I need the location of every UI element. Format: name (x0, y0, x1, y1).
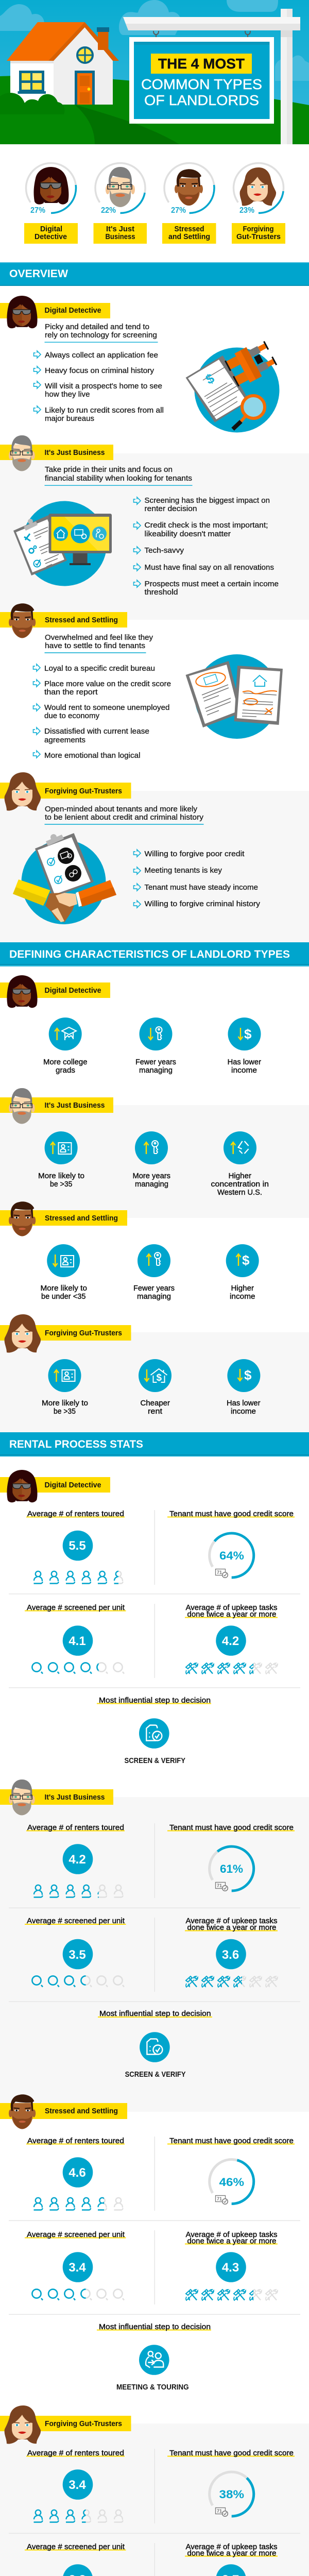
stat: upkeep tasks 4.3: Average # of upkeep tasks (185, 2231, 277, 2239)
name bar (0, 2094, 127, 2129)
stat: good credit score 38%: Tenant must have good credit score (169, 2449, 294, 2458)
bullet list: threshold (144, 588, 178, 597)
stat: renters toured 5.5: 5.5 (68, 1539, 86, 1553)
trait: more college grads: grads (56, 1066, 75, 1075)
sign post (123, 9, 300, 144)
stat: renters toured 5.5 (26, 1510, 125, 1584)
label: Digital Detective (24, 223, 78, 244)
description: rely on technology for screening (45, 331, 157, 340)
stat: most influential step, meeting and touring (97, 2323, 211, 2392)
label: Forgiving Gut-Trusters (232, 223, 285, 244)
panel: overview Forgiving Gut-Trusters (0, 772, 309, 942)
name bar: Stressed and Settling (45, 2107, 118, 2115)
stat: upkeep tasks 3.7: done twice a year or more (187, 2549, 276, 2557)
panel: overview It's Just Business (0, 435, 309, 620)
section band: defining characteristics: DEFINING CHARACTERISTICS OF LANDLORD TYPES (9, 948, 290, 960)
sign board (129, 37, 274, 124)
stat: most influential step, screen and verify: Most influential step to decision (99, 2010, 211, 2018)
trait: higher income: Higher (231, 1284, 254, 1293)
panel: stats Forgiving Gut-Trusters (0, 2405, 309, 2576)
trait: higher concentration in Western U.S.: Western U.S. (217, 1189, 262, 1197)
name bar (0, 772, 131, 811)
panel: stats Stressed and Settling (0, 2094, 300, 2389)
name bar (0, 435, 113, 471)
trait: fewer years managing: managing (137, 1293, 171, 1301)
stat: screened per unit 3.4 (25, 2231, 126, 2300)
trait: has lower income: Has lower (227, 1399, 261, 1408)
gauge: It's Just Business 22% (85, 153, 155, 223)
bullet list: Meeting tenants is key (144, 867, 222, 875)
bullet list: agreements (44, 736, 85, 744)
stat: renters toured 4.2 (26, 1824, 125, 1897)
panel: characteristics Forgiving Gut-Trusters (0, 1314, 309, 1432)
stat: good credit score 61%: 61% (220, 1862, 243, 1875)
stat: good credit score 46% (167, 2137, 295, 2212)
illustration: report, binoculars, magnifier: $ (203, 370, 217, 387)
trait: more likely to be over 35: be >35 (50, 1180, 72, 1189)
bullet list: Screening has the biggest impact on (144, 497, 270, 505)
trait: more likely to be over 35 (42, 1359, 88, 1416)
name bar: Digital Detective (44, 987, 101, 995)
stat: renters toured 3.4: 3.4 (68, 2478, 86, 2492)
description (44, 805, 204, 825)
stat: good credit score 61%: 71 (217, 1883, 222, 1888)
label: It's Just Business: Business (105, 233, 135, 241)
title (141, 56, 262, 108)
stat: screened per unit 4.1: 4.1 (68, 1634, 86, 1648)
stat: most influential step, meeting and touring: MEETING & TOURING (116, 2383, 189, 2392)
name bar: Digital Detective (44, 1481, 101, 1489)
label: It's Just Business (94, 223, 147, 244)
landlord type summary row (0, 144, 309, 262)
name bar: Forgiving Gut-Trusters (45, 2420, 122, 2428)
stat: upkeep tasks 3.7 (185, 2543, 278, 2576)
cloud right (275, 56, 309, 81)
stat: upkeep tasks 3.6: 3.6 (222, 1948, 239, 1962)
trait: has lower income (228, 1018, 261, 1075)
stat: screened per unit 3.4: Average # screened per unit (27, 2231, 125, 2239)
stat: renters toured 4.6: 4.6 (68, 2166, 86, 2180)
trait: more likely to be over 35: More likely to (42, 1399, 88, 1408)
section band: rental process stats (0, 1432, 309, 1456)
trait: fewer years managing: managing (139, 1066, 173, 1075)
bullet list (34, 351, 164, 423)
stat: screened per unit 3.5: Average # screened per unit (27, 1917, 125, 1925)
stat: upkeep tasks 4.2: done twice a year or more (187, 1611, 276, 1619)
bullet list: Credit check is the most important; (144, 521, 268, 530)
title: COMMON TYPES (141, 76, 262, 92)
title: OF LANDLORDS (144, 92, 259, 108)
stat: upkeep tasks 4.2: Average # of upkeep tasks (185, 1604, 277, 1612)
label: It's Just Business: It's Just (106, 225, 134, 233)
trait: has lower income: income (231, 1408, 256, 1416)
bullet list: Willing to forgive criminal history (144, 900, 261, 908)
section band: rental process stats: RENTAL PROCESS STATS (9, 1438, 143, 1450)
bullet list: due to economy (44, 712, 100, 720)
stat: upkeep tasks 3.6: Average # of upkeep tasks (185, 1917, 277, 1925)
panel: characteristics Stressed and Settling (0, 1201, 309, 1332)
stat: good credit score 61%: Tenant must have good credit score (169, 1824, 294, 1832)
illustration: report, binoculars, magnifier (185, 338, 279, 433)
section band: defining characteristics (0, 942, 309, 967)
stat: upkeep tasks 4.3: done twice a year or more (187, 2237, 276, 2245)
illustration: clipboard and handshake (13, 833, 116, 924)
stat: renters toured 4.2: 4.2 (68, 1853, 86, 1867)
bullet list: Will visit a prospect's home to see (45, 382, 162, 391)
description: Open-minded about tenants and more likely (45, 805, 198, 814)
title: THE 4 MOST (158, 56, 245, 72)
stat: good credit score 46%: 71 (217, 2196, 222, 2201)
stat: upkeep tasks 4.3 (185, 2231, 278, 2300)
label: Digital Detective: Digital (40, 225, 62, 233)
cloud left (0, 4, 44, 31)
description (44, 634, 153, 653)
label: Stressed and Settling: Stressed (174, 225, 204, 233)
stat: good credit score 38%: 38% (219, 2488, 244, 2501)
panel: characteristics Digital Detective (0, 967, 309, 1105)
hills (0, 76, 309, 144)
description: financial stability when looking for tenants (45, 474, 192, 483)
stat: good credit score 61% (167, 1824, 295, 1900)
trait: cheaper rent: $ (157, 1372, 162, 1383)
trait: has lower income: $ (244, 1367, 252, 1383)
stat: screened per unit 3.5 (25, 1917, 126, 1987)
bullet list: Likely to run credit scores from all (45, 406, 164, 415)
stat: good credit score 46%: Tenant must have good credit score (169, 2137, 294, 2145)
bullet list: likeability doesn't matter (144, 530, 231, 538)
stat: good credit score 64%: 71 (217, 1570, 222, 1575)
name bar (0, 603, 127, 638)
stat: screened per unit 4.1 (25, 1604, 126, 1673)
stat: renters toured 5.5: Average # of renters toured (27, 1510, 124, 1518)
name bar (0, 2405, 131, 2444)
section band: overview (0, 262, 309, 286)
bullet list: major bureaus (45, 415, 94, 423)
stat: screened per unit 3.4: 3.4 (68, 2261, 86, 2275)
name bar: It's Just Business (44, 1101, 105, 1110)
name bar (0, 296, 110, 329)
stat: most influential step, screen and verify: SCREEN & VERIFY (125, 1757, 185, 1765)
panel: stats It's Just Business (0, 1780, 300, 2077)
gauge: Forgiving Gut-Trusters 23%: 23% (239, 206, 254, 215)
stat: screened per unit 4.1: Average # screened per unit (27, 1604, 125, 1612)
bullet list: Loyal to a specific credit bureau (44, 665, 155, 673)
stat: screened per unit 2.3 (25, 2543, 126, 2576)
bullet list: Prospects must meet a certain income (144, 580, 279, 588)
name bar (0, 1780, 113, 1815)
stat: upkeep tasks 4.2: 4.2 (222, 1634, 239, 1648)
bullet list: Dissatisfied with current lease (44, 727, 149, 736)
stat: screened per unit 2.3: Average # screened per unit (27, 2543, 125, 2551)
trait: higher income: income (230, 1293, 255, 1301)
stat: good credit score 64%: Tenant must have good credit score (169, 1510, 294, 1518)
stat: screened per unit 3.5: 3.5 (68, 1948, 86, 1962)
stat: most influential step, meeting and touring: Most influential step to decision (99, 2323, 211, 2331)
section band: overview: OVERVIEW (9, 268, 68, 280)
cloud top right (227, 0, 278, 12)
trait: higher concentration in Western U.S. (211, 1131, 269, 1197)
bullet list: Willing to forgive poor credit (144, 850, 244, 858)
stat: most influential step, screen and verify: Most influential step to decision (99, 1697, 211, 1705)
trait: cheaper rent: rent (148, 1408, 162, 1416)
panel: characteristics It's Just Business (0, 1088, 309, 1218)
bullet list: how they live (45, 391, 90, 399)
trait: more likely to be under 35: be under <35 (41, 1293, 85, 1301)
trait: more years managing: managing (135, 1180, 168, 1189)
description: have to settle to find tenants (45, 642, 145, 650)
bullet list: Would rent to someone unemployed (44, 704, 170, 712)
trait: fewer years managing: Fewer years (133, 1284, 175, 1293)
trait: higher income (226, 1244, 259, 1301)
description (44, 466, 193, 486)
trait: more years managing (133, 1131, 170, 1189)
description: Take pride in their units and focus on (45, 466, 173, 474)
trait: higher concentration in Western U.S.: Higher (229, 1172, 251, 1180)
trait: has lower income: income (231, 1066, 257, 1075)
name bar (0, 1314, 131, 1353)
trait: fewer years managing: Fewer years (135, 1058, 176, 1066)
name bar: Stressed and Settling (45, 616, 118, 624)
label: Forgiving Gut-Trusters: Forgiving (243, 225, 274, 233)
label: Digital Detective: Detective (35, 233, 67, 241)
house (7, 22, 119, 105)
name bar: Stressed and Settling (45, 1214, 118, 1223)
name bar: Forgiving Gut-Trusters (45, 1329, 122, 1337)
gauge: It's Just Business 22%: 22% (101, 206, 116, 215)
trait: higher concentration in Western U.S.: concentration in (211, 1180, 269, 1189)
name bar (0, 1201, 127, 1236)
stat: good credit score 64%: 64% (219, 1549, 244, 1562)
trait: fewer years managing (135, 1018, 176, 1075)
name bar (0, 1470, 110, 1503)
bullet list: Tech-savvy (144, 547, 184, 555)
trait: more likely to be under 35: More likely to (40, 1284, 87, 1293)
illustration: clipboard and monitor (13, 501, 112, 586)
label: Forgiving Gut-Trusters: Gut-Trusters (236, 233, 281, 241)
stat: renters toured 4.6: Average # of renters toured (27, 2137, 124, 2145)
cloud center (119, 0, 181, 35)
stat: most influential step, screen and verify (98, 2010, 212, 2079)
bullet list: Heavy focus on criminal history (45, 367, 154, 375)
name bar: Forgiving Gut-Trusters (45, 787, 122, 795)
stat: most influential step, screen and verify: SCREEN & VERIFY (125, 2071, 186, 2079)
panel: overview Stressed and Settling (0, 603, 309, 791)
description: to be lenient about credit and criminal history (45, 814, 204, 822)
hero illustration (0, 0, 309, 144)
gauge: Digital Detective 27%: 27% (30, 206, 45, 215)
trait: has lower income: Has lower (228, 1058, 261, 1066)
stat: renters toured 3.4: Average # of renters toured (27, 2449, 124, 2458)
trait: higher income: $ (242, 1252, 250, 1268)
trait: cheaper rent: Cheaper (140, 1399, 170, 1408)
trait: has lower income (227, 1359, 261, 1416)
label: Stressed and Settling: and Settling (168, 233, 210, 241)
bullet list (134, 850, 261, 908)
bullet list (33, 664, 171, 760)
title highlight (151, 54, 252, 74)
name bar: It's Just Business (44, 1793, 105, 1802)
description: Picky and detailed and tend to (45, 323, 149, 331)
panel: stats Digital Detective (0, 1470, 300, 1763)
bullet list: More emotional than logical (44, 752, 140, 760)
trait: more likely to be over 35: be >35 (54, 1408, 76, 1416)
name bar (0, 1088, 113, 1124)
stat: good credit score 46%: 46% (219, 2176, 244, 2189)
gauge: Forgiving Gut-Trusters 23% (224, 153, 294, 223)
bullet list: Must have final say on all renovations (144, 564, 274, 572)
bullet list (134, 497, 279, 597)
bullet list: Always collect an application fee (45, 351, 158, 360)
trait: more college grads (43, 1018, 88, 1075)
trait: more likely to be under 35 (40, 1244, 87, 1301)
stat: good credit score 64% (167, 1510, 295, 1587)
illustration: marked-up documents (185, 654, 283, 739)
stat: upkeep tasks 3.6: done twice a year or more (187, 1924, 276, 1932)
name bar: Digital Detective (44, 307, 101, 315)
trait: has lower income: $ (244, 1026, 252, 1042)
trait: fewer years managing (133, 1244, 175, 1301)
stat: renters toured 4.6 (26, 2137, 125, 2210)
gauge: Stressed and Settling 27% (154, 153, 224, 223)
label: Stressed and Settling (162, 223, 216, 244)
stat: upkeep tasks 3.6 (185, 1917, 278, 1987)
trait: more college grads: More college (43, 1058, 88, 1066)
bushes (0, 93, 65, 114)
bullet list: Tenant must have steady income (144, 884, 258, 892)
gauge: Stressed and Settling 27%: 27% (171, 206, 186, 215)
stat: upkeep tasks 3.7: Average # of upkeep tasks (185, 2543, 277, 2551)
panel: overview Digital Detective (0, 286, 309, 453)
stat: good credit score 38%: 71 (217, 2509, 222, 2514)
stat: most influential step, screen and verify (97, 1697, 211, 1765)
stat: good credit score 38% (167, 2449, 295, 2526)
stat: upkeep tasks 4.3: 4.3 (222, 2261, 239, 2275)
name bar: It's Just Business (44, 449, 105, 457)
bullet list: than the report (44, 688, 98, 697)
trait: more years managing: More years (133, 1172, 170, 1180)
trait: more likely to be over 35: More likely to (38, 1172, 84, 1180)
name bar (0, 975, 110, 1008)
description (44, 323, 158, 343)
description: Overwhelmed and feel like they (45, 634, 153, 642)
bullet list: renter decision (144, 505, 197, 513)
trait: more likely to be over 35 (38, 1131, 84, 1189)
bullet list: Place more value on the credit score (44, 680, 171, 688)
stat: renters toured 3.4 (26, 2449, 125, 2522)
stat: upkeep tasks 4.2 (185, 1604, 278, 1674)
stat: renters toured 4.2: Average # of renters toured (27, 1824, 124, 1832)
gauge: Digital Detective 27% (16, 153, 86, 223)
trait: cheaper rent (139, 1359, 171, 1416)
